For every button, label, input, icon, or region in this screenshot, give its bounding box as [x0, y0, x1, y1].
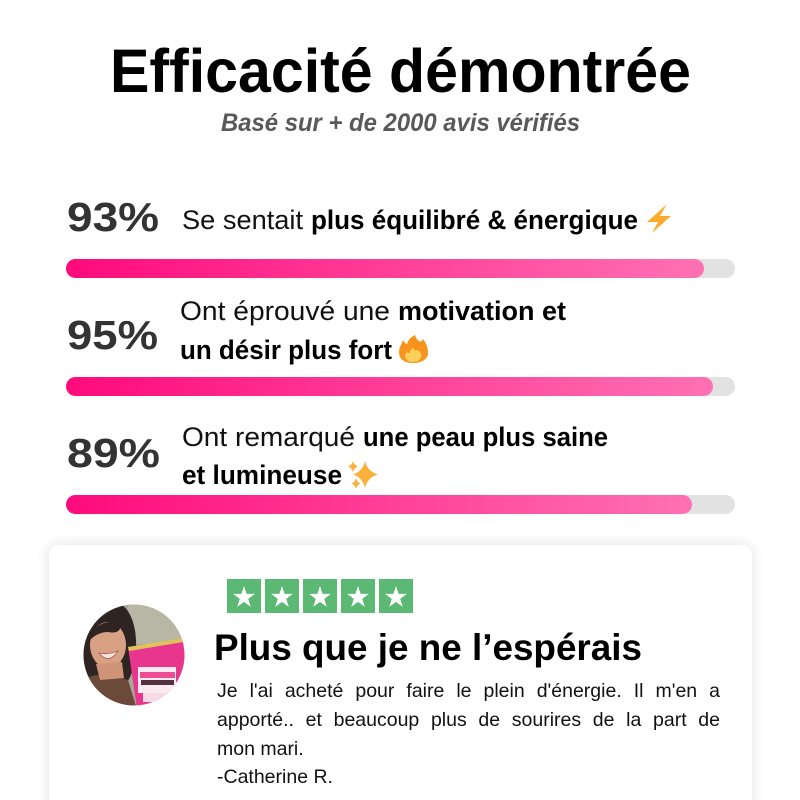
statement 93%: plus équilibré & énergique [311, 205, 638, 235]
percentage 93%: 93% [67, 194, 159, 240]
statement 95% [180, 296, 566, 365]
icon: sparkles [348, 461, 378, 489]
review text: mon mari. [217, 738, 304, 760]
bar 95% [66, 377, 735, 396]
bar 93% [66, 259, 735, 278]
statement 95%: un désir plus fort [180, 335, 392, 365]
icon: lightning bolt [647, 204, 671, 233]
statement 95%: Ont éprouvé une [180, 296, 390, 326]
review text: apporté.. et beaucoup plus de sourires de la part de [217, 709, 720, 731]
review card [49, 545, 752, 800]
review text: Je l'ai acheté pour faire le plein d'énergie. Il m'en a [217, 680, 720, 702]
bar 89% [66, 495, 735, 514]
statement 89%: Ont remarqué [182, 422, 355, 452]
panel: statistic 93% [66, 194, 735, 278]
subtitle: Basé sur + de 2000 avis vérifiés [221, 109, 580, 137]
avatar: customer holding product [83, 604, 190, 709]
title: Efficacité démontrée [110, 37, 691, 105]
panel: statistic 89% [66, 422, 735, 514]
statement 89%: une peau plus saine [363, 422, 608, 452]
review heading: Plus que je ne l’espérais [214, 627, 642, 668]
percentage 95%: 95% [67, 312, 158, 358]
review text [217, 680, 720, 788]
statement 89% [182, 422, 608, 490]
percentage 89%: 89% [67, 430, 160, 476]
statement 89%: et lumineuse [182, 460, 342, 490]
icon: flame [399, 335, 428, 363]
panel: statistic 95% [66, 296, 735, 396]
statement 95%: motivation et [398, 296, 566, 326]
statement 93% [182, 205, 638, 235]
icon: five star rating [227, 579, 413, 613]
statement 93%: Se sentait [182, 205, 304, 235]
review text: -Catherine R. [217, 766, 333, 788]
